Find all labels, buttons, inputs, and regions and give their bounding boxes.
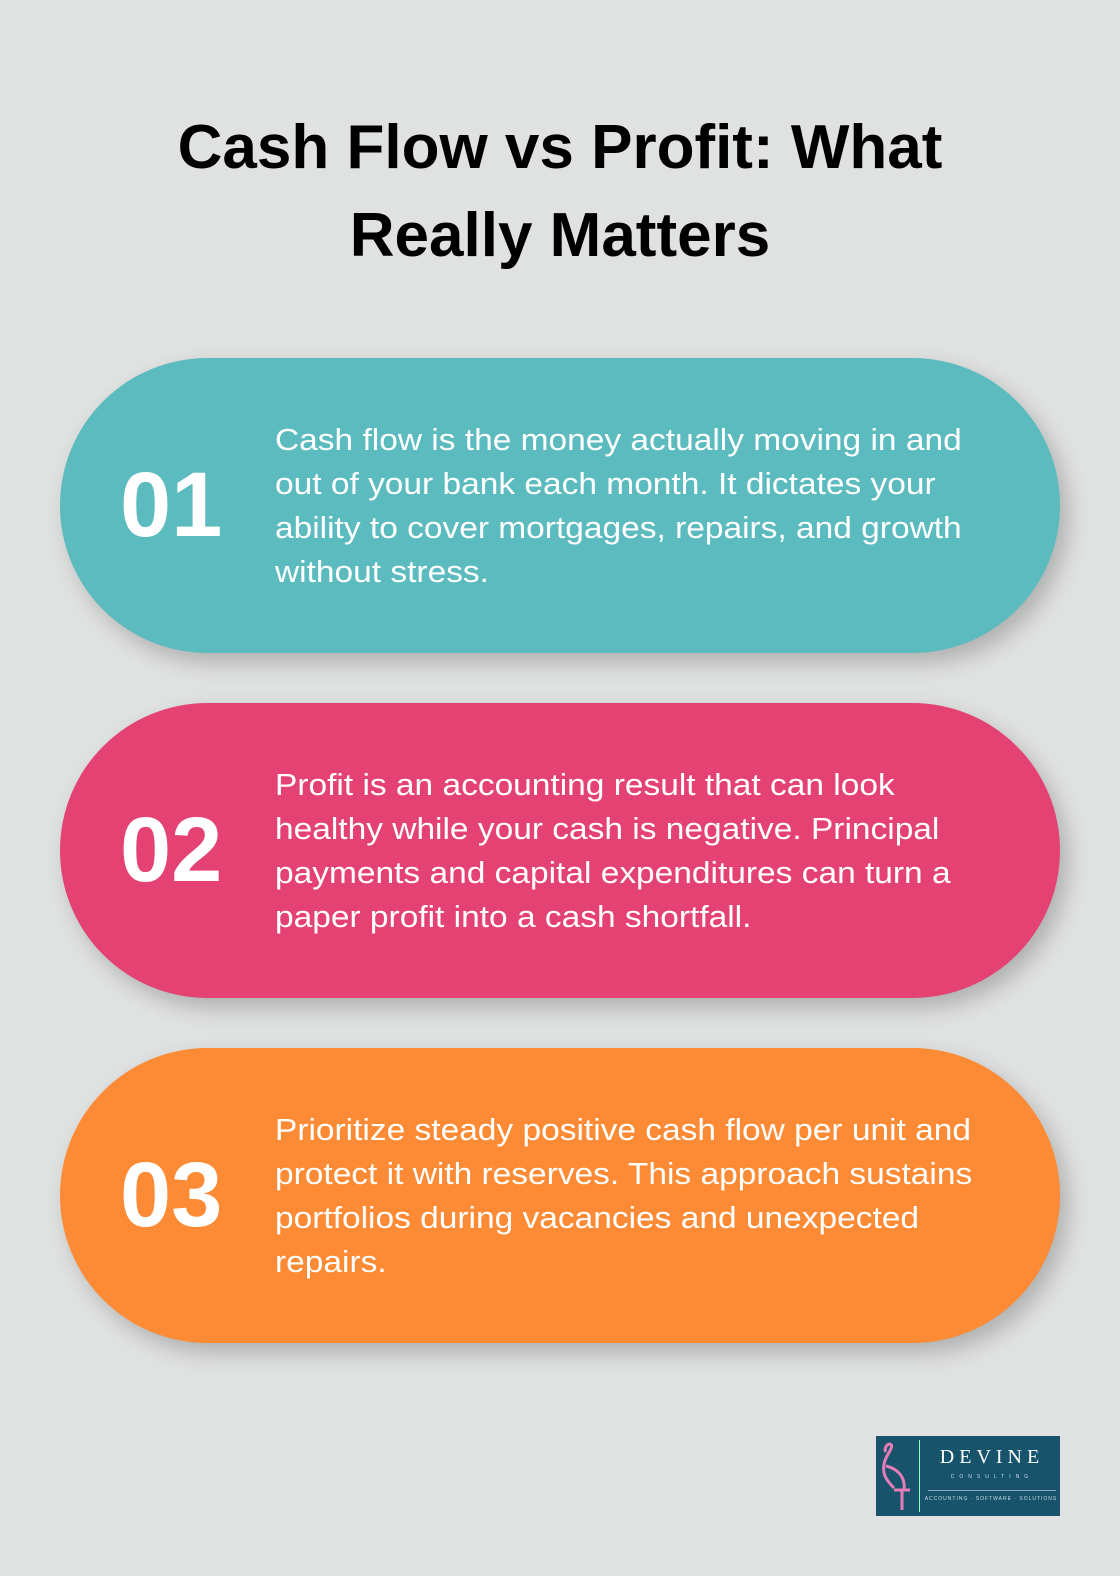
title: Cash Flow vs Profit: What <box>178 113 942 182</box>
text 01: without stress. <box>275 554 489 588</box>
text 03: repairs. <box>275 1244 387 1278</box>
text 02: paper profit into a cash shortfall. <box>275 898 751 934</box>
logo: CONSULTING <box>951 1474 1033 1480</box>
number 01: 01 <box>120 454 222 556</box>
text 03: protect it with reserves. This approach sustains <box>275 1156 972 1190</box>
panel: 03 <box>60 1048 1060 1343</box>
text 02: healthy while your cash is negative. Principal <box>275 810 939 846</box>
panel: 01 <box>60 358 1060 653</box>
title <box>178 113 942 270</box>
text 03: Prioritize steady positive cash flow per unit and <box>275 1112 971 1146</box>
text 01: out of your bank each month. It dictates your <box>275 466 936 500</box>
brand text: DEVINE <box>940 1446 1044 1468</box>
text 01: Cash flow is the money actually moving in and <box>275 422 962 456</box>
text 02: payments and capital expenditures can turn a <box>275 854 951 890</box>
title: Really Matters <box>350 201 770 270</box>
number 02: 02 <box>120 799 222 901</box>
text 01 <box>275 422 962 588</box>
logo <box>876 1436 1060 1516</box>
text 02 <box>275 766 951 934</box>
logo: ACCOUNTING · SOFTWARE · SOLUTIONS <box>925 1496 1057 1502</box>
text 03: portfolios during vacancies and unexpected <box>275 1200 919 1234</box>
icon: flamingo <box>882 1442 910 1510</box>
text 01: ability to cover mortgages, repairs, and growth <box>275 510 962 544</box>
text 03 <box>275 1112 972 1278</box>
panel: 02 <box>60 703 1060 998</box>
text 02: Profit is an accounting result that can look <box>275 766 895 802</box>
number 03: 03 <box>120 1144 222 1246</box>
